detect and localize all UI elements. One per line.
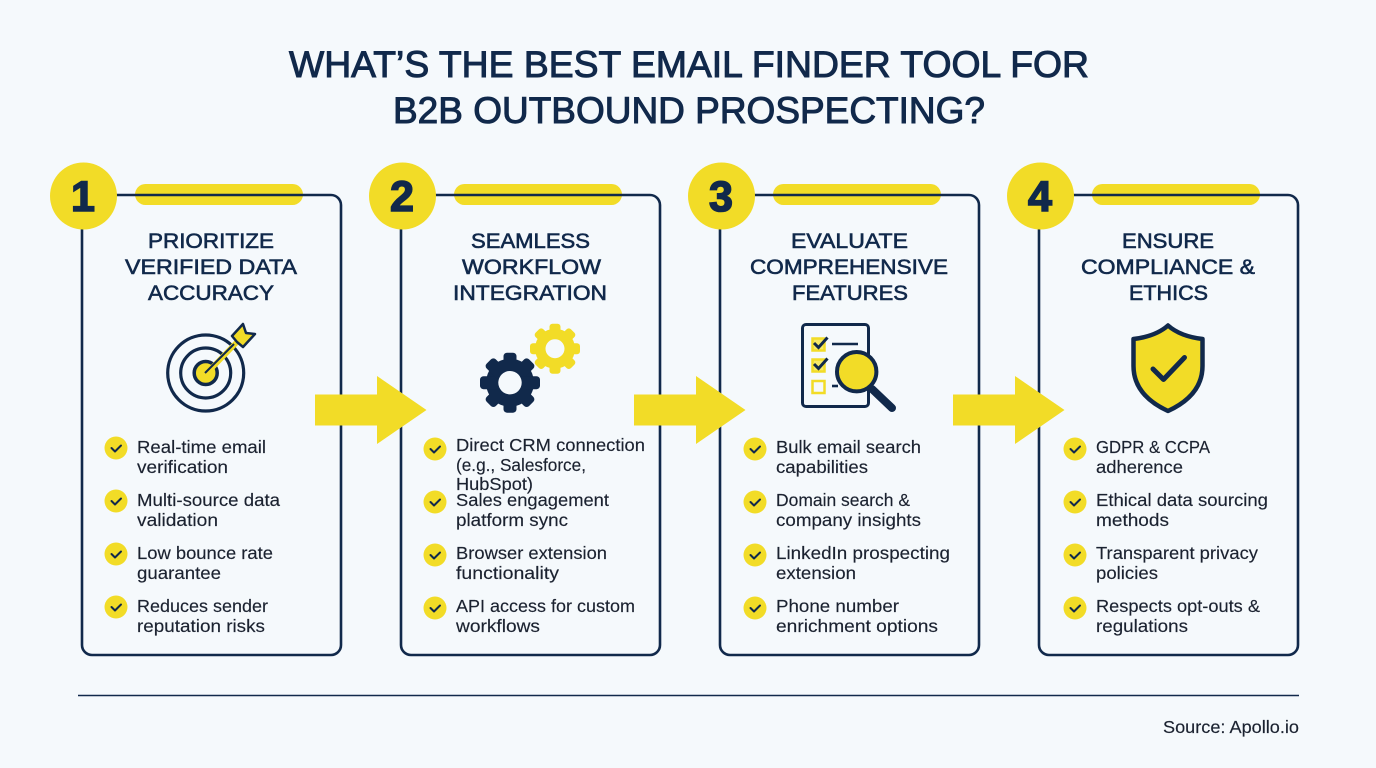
item: LinkedIn prospecting extension: LinkedIn prospecting (776, 543, 950, 563)
heading 2: INTEGRATION (453, 282, 607, 305)
item: low bounce rate guarantee (104, 542, 273, 583)
item: multi-source data validation: validation (137, 510, 218, 530)
panel: step 2 (369, 162, 660, 655)
item: reduces sender reputation risks: Reduces sender (137, 596, 268, 616)
item: bulk email search capabilities: capabilities (776, 457, 868, 477)
number badge 1 (50, 162, 117, 230)
item: transparent privacy policies: policies (1096, 563, 1158, 583)
item: direct CRM connection: HubSpot) (456, 474, 533, 494)
item: bulk email search capabilities: Bulk email search (776, 437, 921, 457)
item: real-time email verification: Real-time email (137, 437, 266, 457)
source note: Source: Apollo.io (1163, 717, 1299, 737)
heading 1: VERIFIED DATA (125, 256, 297, 279)
number badge 3: 3 (709, 173, 733, 221)
heading 1: PRIORITIZE (148, 230, 274, 253)
item: sales engagement platform sync: platform sync (456, 510, 568, 530)
icon: target with arrow (168, 324, 255, 411)
arrow: step 2 to 3 (634, 376, 746, 444)
item: ethical data sourcing methods: Ethical data sourcing (1096, 490, 1268, 510)
heading 3: COMPREHENSIVE (750, 256, 948, 279)
item: phone number enrichment options (744, 596, 938, 636)
heading 1 (125, 230, 297, 305)
heading 3: EVALUATE (791, 230, 908, 253)
item: low bounce rate guarantee: guarantee (137, 563, 221, 583)
icon: shield with check (1134, 326, 1202, 411)
item: browser extension functionality: functionality (456, 563, 559, 583)
card frame 4 (1039, 195, 1298, 655)
item: browser extension functionality (424, 543, 607, 583)
item: browser extension functionality: Browser extension (456, 543, 607, 563)
number badge 3 (688, 162, 755, 230)
panel: step 3 (688, 162, 979, 655)
checklist 1 (104, 436, 280, 636)
item: LinkedIn prospecting extension (744, 543, 950, 583)
number badge 4 (1007, 162, 1074, 230)
heading 4: COMPLIANCE & (1081, 256, 1255, 279)
item: reduces sender reputation risks (104, 596, 268, 636)
item: domain search and company insights (744, 490, 921, 530)
icon: gears (480, 324, 580, 413)
item: API access for custom workflows: workflows (455, 616, 540, 636)
item: multi-source data validation: Multi-source data (137, 490, 280, 510)
item: transparent privacy policies (1064, 543, 1258, 583)
heading 3 (750, 230, 948, 305)
title: B2B OUTBOUND PROSPECTING? (393, 90, 985, 131)
item: ethical data sourcing methods: methods (1096, 510, 1169, 530)
card frame 1 (82, 195, 341, 655)
checklist 2 (424, 435, 645, 636)
item: API access for custom workflows (424, 596, 635, 636)
item: phone number enrichment options: Phone number (776, 596, 899, 616)
item: direct CRM connection (424, 435, 645, 494)
item: GDPR and CCPA adherence: GDPR & CCPA (1096, 437, 1210, 457)
item: sales engagement platform sync (424, 490, 609, 530)
heading 1: ACCURACY (148, 282, 274, 305)
panel: step 1 (50, 162, 341, 655)
title (289, 44, 1089, 131)
heading 2 (453, 230, 607, 305)
checklist 3 (744, 437, 950, 636)
card frame 3 (720, 195, 979, 655)
number badge 1: 1 (71, 173, 95, 221)
item: transparent privacy policies: Transparent privacy (1096, 543, 1258, 563)
number badge 2 (369, 162, 436, 230)
title: WHAT’S THE BEST EMAIL FINDER TOOL FOR (289, 44, 1089, 85)
panel: step 4 (1007, 162, 1298, 655)
item: low bounce rate guarantee: Low bounce rate (137, 543, 273, 563)
item: sales engagement platform sync: Sales engagement (456, 490, 609, 510)
item: domain search and company insights: Domain search & (776, 490, 910, 510)
number badge 2: 2 (390, 173, 414, 221)
item: direct CRM connection: Direct CRM connection (456, 435, 645, 455)
item: API access for custom workflows: API access for custom (456, 596, 635, 616)
item: direct CRM connection: (e.g., Salesforce, (456, 455, 586, 475)
item: reduces sender reputation risks: reputation risks (137, 616, 265, 636)
yellow tab 3 (773, 184, 941, 205)
item: real-time email verification (104, 436, 266, 477)
yellow tab 2 (454, 184, 622, 205)
yellow tab 1 (135, 184, 303, 205)
item: LinkedIn prospecting extension: extension (776, 563, 856, 583)
heading 2: WORKFLOW (462, 256, 601, 279)
card frame 2 (401, 195, 660, 655)
heading 3: FEATURES (792, 282, 908, 305)
item: ethical data sourcing methods (1064, 490, 1268, 530)
item: phone number enrichment options: enrichment options (776, 616, 938, 636)
item: multi-source data validation (104, 490, 280, 530)
item: bulk email search capabilities (744, 437, 921, 477)
item: real-time email verification: verification (137, 457, 228, 477)
icon: checklist with magnifier (802, 324, 892, 408)
yellow tab 4 (1092, 184, 1260, 205)
item: respects opt-outs and regulations (1064, 596, 1260, 636)
arrow: step 1 to 2 (315, 376, 426, 444)
item: domain search and company insights: company insights (776, 510, 921, 530)
heading 4 (1081, 230, 1255, 305)
heading 2: SEAMLESS (471, 230, 590, 253)
item: GDPR and CCPA adherence (1064, 437, 1210, 477)
heading 4: ENSURE (1122, 230, 1214, 253)
item: GDPR and CCPA adherence: adherence (1096, 457, 1183, 477)
item: respects opt-outs and regulations: Respects opt-outs & (1096, 596, 1260, 616)
number badge 4: 4 (1028, 173, 1052, 221)
heading 4: ETHICS (1129, 282, 1208, 305)
checklist 4 (1064, 437, 1268, 636)
item: respects opt-outs and regulations: regulations (1096, 616, 1188, 636)
arrow: step 3 to 4 (953, 376, 1064, 444)
